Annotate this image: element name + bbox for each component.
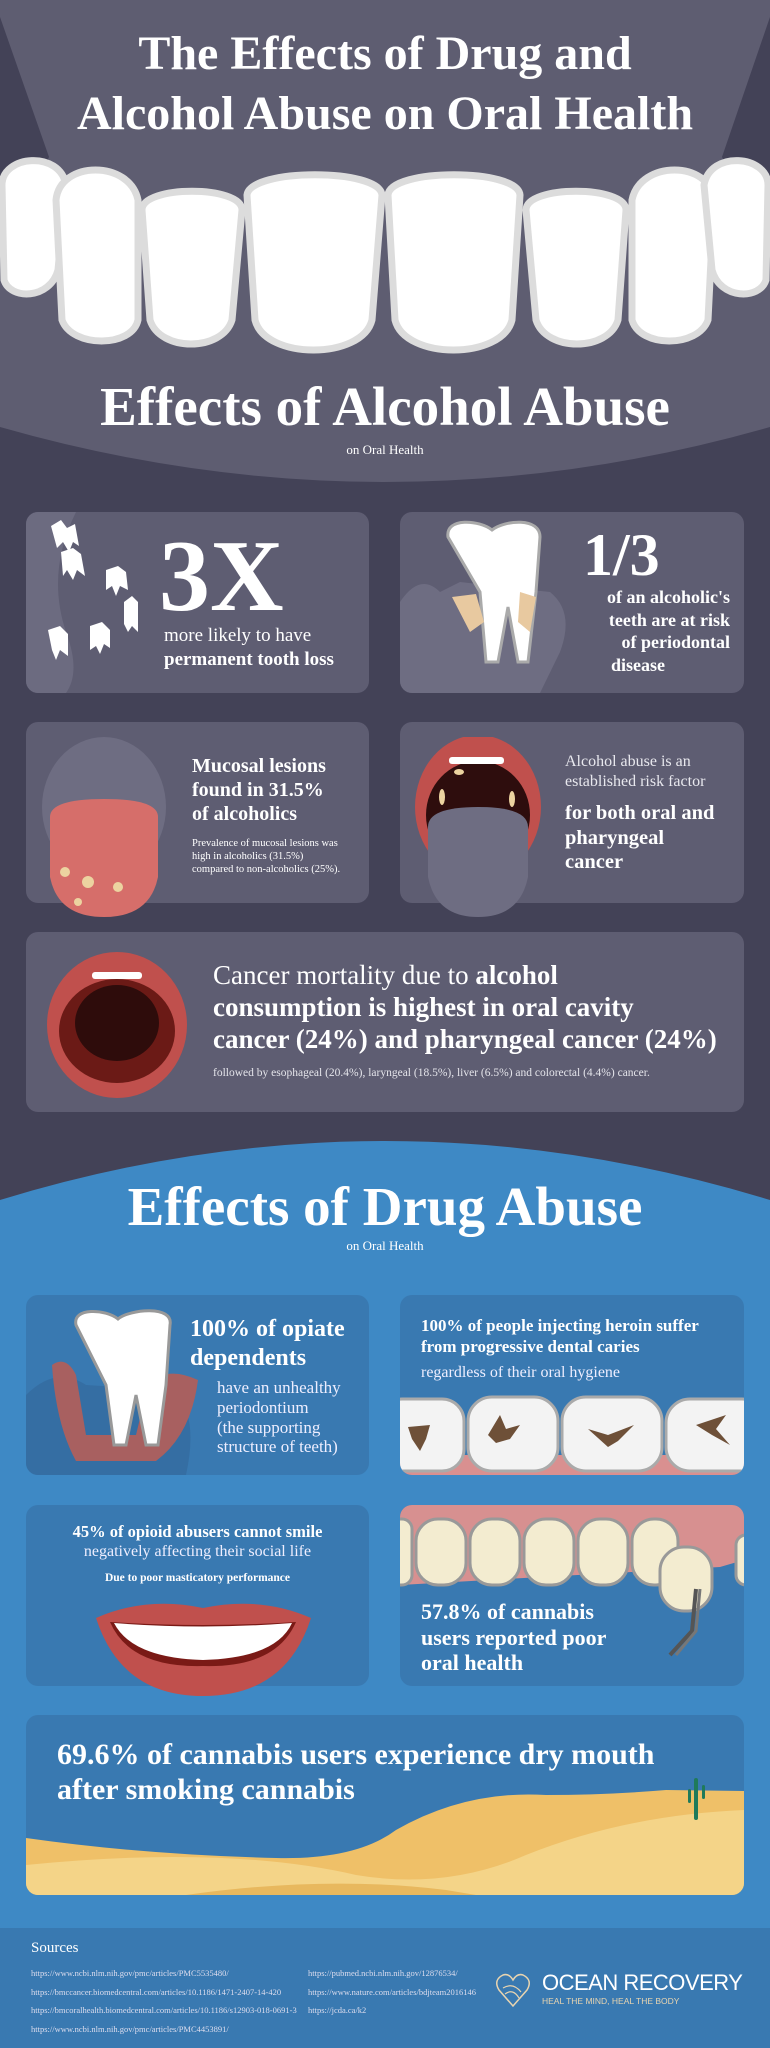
text: cannabis heading: oral health xyxy=(421,1650,523,1675)
text: source links column 2: https://jcda.ca/k2 xyxy=(308,2005,366,2015)
text: heroin heading xyxy=(421,1316,699,1356)
panel: 1/3 periodontal xyxy=(400,512,744,693)
text: source links column 2: https://www.nature.com/articles/bdjteam2016146 xyxy=(308,1986,476,1996)
text: followed by: followed by esophageal (20.4%), laryngeal (18.5%), liver (6.5%) and colorectal (4.4%) cancer. xyxy=(213,1067,650,1079)
text: both cancers: pharyngeal xyxy=(565,826,664,848)
footer: sources xyxy=(31,1940,742,2034)
panel: cancer mortality xyxy=(26,932,744,1112)
text: tooth loss: permanent tooth loss xyxy=(164,649,334,670)
text: dry mouth xyxy=(57,1738,654,1806)
icon: heart xyxy=(496,1974,530,2007)
heading: alcohol section: Effects of Alcohol Abuse xyxy=(100,376,670,437)
stat: 1/3: 1/3 xyxy=(583,522,660,588)
text: source links: https://bmcoralhealth.biomedcentral.com/articles/10.1186/s12903-018-0691-3 xyxy=(31,2005,297,2015)
text: periodontium: (the supporting xyxy=(217,1418,320,1437)
panel: opiate dependents xyxy=(26,1295,369,1475)
icon: falling teeth xyxy=(26,512,138,693)
text: periodontal risk: of an alcoholic's xyxy=(607,587,730,607)
title: Alcohol Abuse on Oral Health xyxy=(77,87,693,140)
text: periodontal risk: disease xyxy=(611,654,665,674)
text: cancer mortality: cancer (24%) and pharyngeal cancer (24%) xyxy=(213,1024,717,1054)
text: prevalence note xyxy=(192,838,340,875)
text: tooth loss xyxy=(164,625,334,670)
text: opiate heading xyxy=(190,1316,345,1371)
text: cancer mortality: Cancer mortality due to alcohol xyxy=(213,960,558,990)
text: prevalence note: Prevalence of mucosal lesions was xyxy=(192,838,338,849)
text: mucosal lesions: of alcoholics xyxy=(192,803,297,825)
title xyxy=(77,27,693,140)
panel: oral and pharyngeal cancer risk xyxy=(400,722,744,903)
text: periodontium: periodontium xyxy=(217,1398,309,1417)
icon: teeth and veneer xyxy=(400,1505,744,1656)
text: dry mouth: after smoking cannabis xyxy=(57,1773,355,1806)
text: social life: negatively affecting their social life xyxy=(84,1543,311,1560)
text: tooth loss: more likely to have xyxy=(164,625,311,646)
logo: ocean recovery xyxy=(496,1970,742,2007)
text: source links column 2 xyxy=(308,1968,476,2015)
panel: heroin caries xyxy=(400,1295,744,1475)
panel: mucosal lesions xyxy=(26,722,369,903)
text: oral hygiene: regardless of their oral hygiene xyxy=(421,1364,620,1381)
text: periodontium: have an unhealthy xyxy=(217,1378,341,1397)
text: mucosal lesions xyxy=(192,755,326,825)
text: source links xyxy=(31,1968,297,2034)
icon: open mouth xyxy=(47,952,187,1098)
text: cannabis heading: 57.8% of cannabis xyxy=(421,1599,594,1624)
text: risk factor: Alcohol abuse is an xyxy=(565,753,691,770)
icon: open mouth with tongue xyxy=(415,737,541,917)
text: both cancers: for both oral and xyxy=(565,802,714,824)
text: heroin heading: 100% of people injecting heroin suffer xyxy=(421,1316,699,1335)
text: opiate heading: 100% of opiate xyxy=(190,1316,345,1342)
text: mucosal lesions: Mucosal lesions xyxy=(192,755,326,777)
text: risk factor xyxy=(565,753,706,790)
text: periodontal risk: of periodontal xyxy=(621,632,730,652)
text: source links column 2: https://pubmed.ncbi.nlm.nih.gov/12876534/ xyxy=(308,1968,458,1978)
subheading: on Oral Health xyxy=(346,1238,424,1253)
icon: tooth with gum disease xyxy=(400,520,566,693)
subheading: on Oral Health xyxy=(346,442,424,457)
heading: sources: Sources xyxy=(31,1940,78,1956)
text: dry mouth: 69.6% of cannabis users experience dry mouth xyxy=(57,1738,654,1771)
stat: 3X: 3X xyxy=(159,520,284,633)
text: prevalence note: compared to non-alcoholics (25%). xyxy=(192,864,340,875)
text: source links: https://www.ncbi.nlm.nih.gov/pmc/articles/PMC4453891/ xyxy=(31,2024,229,2034)
text: source links: https://www.ncbi.nlm.nih.gov/pmc/articles/PMC5535480/ xyxy=(31,1968,229,1978)
text: cancer mortality xyxy=(213,960,717,1054)
text: masticatory: Due to poor masticatory performance xyxy=(105,1572,290,1584)
text: heroin heading: from progressive dental caries xyxy=(421,1337,640,1356)
text: cancer mortality: consumption is highest in oral cavity xyxy=(213,992,634,1022)
text: opioid heading: 45% of opioid abusers cannot smile xyxy=(73,1522,322,1541)
text: cannabis heading: users reported poor xyxy=(421,1624,606,1650)
text: periodontium: structure of teeth) xyxy=(217,1437,338,1456)
panel: cannabis poor oral health xyxy=(400,1505,744,1686)
icon: desert dunes xyxy=(26,1778,744,1895)
icon: tongue xyxy=(42,737,166,917)
text: brand: OCEAN RECOVERY xyxy=(542,1970,742,1995)
icon: smiling lips xyxy=(96,1604,311,1696)
text: source links: https://bmccancer.biomedcentral.com/articles/10.1186/1471-2407-14-420 xyxy=(31,1986,281,1996)
text: cannabis heading xyxy=(421,1599,606,1675)
panel: dry mouth xyxy=(26,1715,744,1895)
text: risk factor: established risk factor xyxy=(565,773,705,790)
heading: drug section: Effects of Drug Abuse xyxy=(128,1176,642,1237)
text: opiate heading: dependents xyxy=(190,1345,306,1371)
text: mucosal lesions: found in 31.5% xyxy=(192,779,324,801)
panel: opioid smile xyxy=(26,1505,369,1686)
text: periodontal risk: teeth are at risk xyxy=(609,610,730,630)
text: both cancers xyxy=(565,802,714,873)
text: periodontium xyxy=(217,1378,341,1456)
text: both cancers: cancer xyxy=(565,851,623,873)
title: The Effects of Drug and xyxy=(138,27,632,80)
icon: molars with caries xyxy=(400,1396,744,1475)
text: tagline: HEAL THE MIND, HEAL THE BODY xyxy=(542,1996,679,2006)
illustration: top teeth xyxy=(0,157,770,354)
text: periodontal risk xyxy=(607,587,730,674)
text: prevalence note: high in alcoholics (31.5%) xyxy=(192,851,303,862)
icon: tooth with gum xyxy=(26,1309,198,1475)
panel: 3X tooth loss xyxy=(26,512,369,693)
